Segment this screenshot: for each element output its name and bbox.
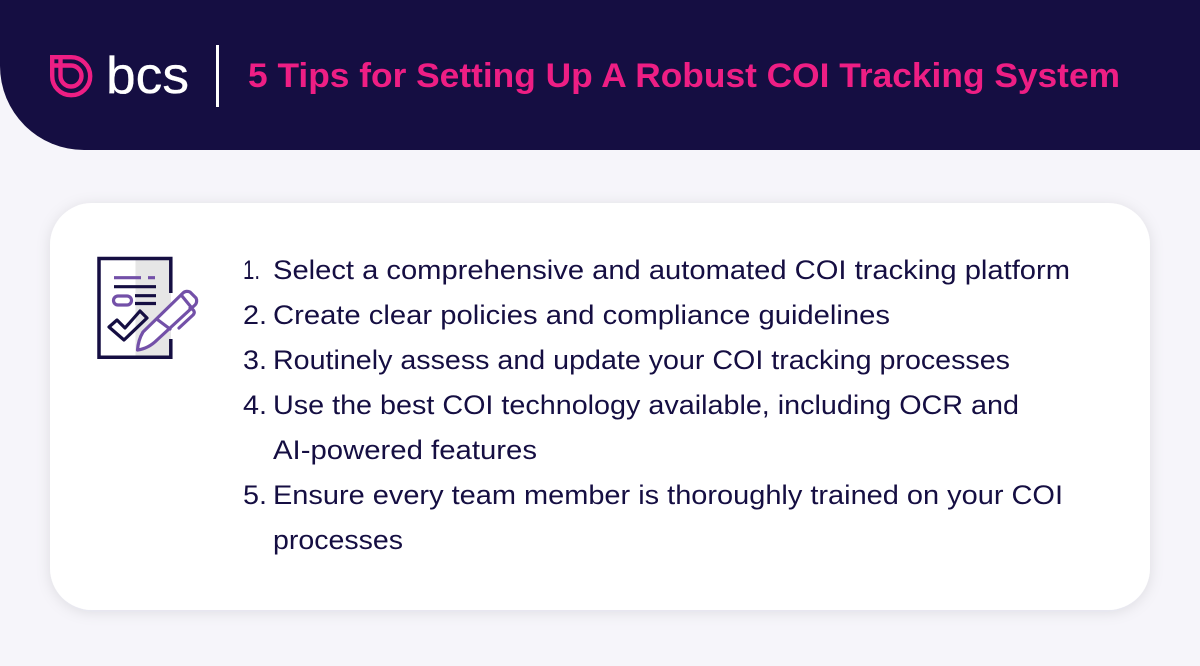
logo wordmark: bcs — [106, 47, 189, 105]
tip 5: processes — [273, 525, 403, 555]
tip 1: 1. — [243, 255, 260, 285]
tip 5 — [243, 480, 1063, 555]
panel: tips card — [50, 203, 1150, 610]
tip 5: 5. — [243, 480, 267, 510]
tip 3: 3. — [243, 345, 267, 375]
icon: bcs mark — [52, 57, 90, 95]
tip 4: 4. — [243, 390, 267, 420]
icon: document with checkmark and pen — [99, 258, 197, 358]
list of tips — [243, 255, 1070, 555]
header divider — [216, 45, 219, 107]
tip 4 — [243, 390, 1019, 465]
tip 1: Select a comprehensive and automated COI tracking platform — [273, 255, 1070, 285]
header banner — [0, 0, 1200, 150]
tip 2: Create clear policies and compliance guidelines — [273, 300, 890, 330]
tip 3: Routinely assess and update your COI tracking processes — [273, 345, 1010, 375]
tip 5: Ensure every team member is thoroughly trained on your COI — [273, 480, 1063, 510]
logo: bcs — [52, 47, 189, 105]
tip 4: Use the best COI technology available, including OCR and — [273, 390, 1019, 420]
title: 5 Tips for Setting Up A Robust COI Tracking System — [248, 57, 1120, 95]
tip 4: AI-powered features — [273, 435, 537, 465]
tip 2: 2. — [243, 300, 267, 330]
